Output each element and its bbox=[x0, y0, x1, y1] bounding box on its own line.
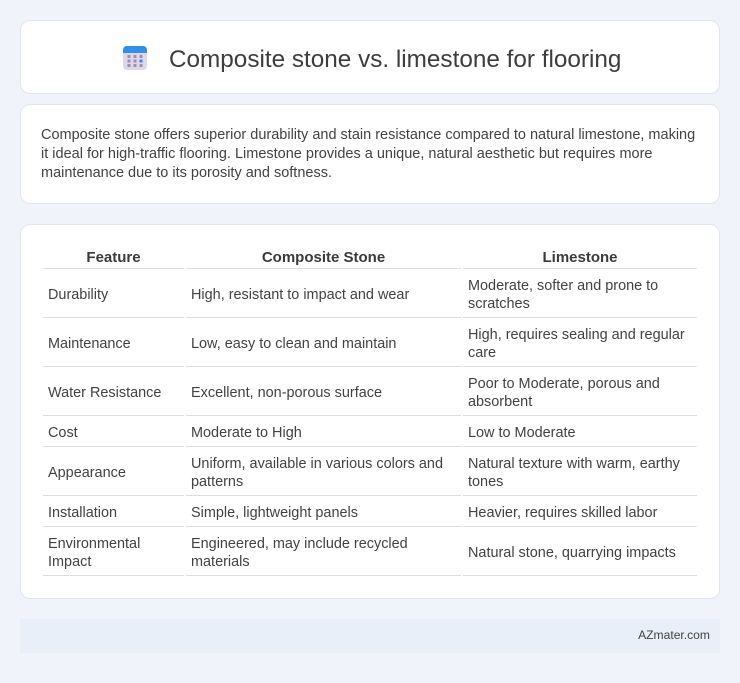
comparison table panel bbox=[20, 224, 720, 599]
row: Appearance: Appearance bbox=[48, 465, 126, 481]
icon: calendar bbox=[123, 46, 147, 70]
summary panel bbox=[20, 104, 720, 204]
summary text: Composite stone offers superior durability and stain resistance compared to natural limestone, making bbox=[41, 127, 695, 143]
comparison table: High, resistant to impact and wear bbox=[191, 287, 409, 303]
comparison table: Natural texture with warm, earthy bbox=[468, 456, 680, 472]
row: Environmental Impact: Environmental bbox=[48, 536, 140, 552]
comparison table: Moderate, softer and prone to bbox=[468, 278, 658, 294]
comparison table: care bbox=[468, 345, 496, 361]
row: Water Resistance: Water Resistance bbox=[48, 385, 161, 401]
comparison table: Natural stone, quarrying impacts bbox=[468, 545, 676, 561]
comparison table: scratches bbox=[468, 296, 530, 312]
row: Environmental Impact bbox=[48, 536, 140, 570]
comparison table: Simple, lightweight panels bbox=[191, 505, 358, 521]
comparison table: Poor to Moderate, porous and bbox=[468, 376, 660, 392]
comparison table: absorbent bbox=[468, 394, 532, 410]
comparison table: Low to Moderate bbox=[468, 425, 576, 441]
title card bbox=[20, 20, 720, 94]
comparison table: Heavier, requires skilled labor bbox=[468, 505, 657, 521]
footer bar bbox=[20, 619, 720, 653]
header: Composite Stone: Composite Stone bbox=[262, 249, 385, 266]
summary text bbox=[41, 127, 695, 181]
comparison table: High, requires sealing and regular bbox=[468, 327, 685, 343]
comparison table: Engineered, may include recycled bbox=[191, 536, 408, 552]
row: Durability: Durability bbox=[48, 287, 108, 303]
comparison table: Moderate to High bbox=[191, 425, 302, 441]
comparison table: tones bbox=[468, 474, 503, 490]
comparison table: materials bbox=[191, 554, 250, 570]
row: Cost: Cost bbox=[48, 425, 78, 441]
title: Composite stone vs. limestone for flooring bbox=[169, 46, 621, 73]
row: Maintenance: Maintenance bbox=[48, 336, 131, 352]
comparison table bbox=[43, 249, 697, 576]
row: Installation: Installation bbox=[48, 505, 117, 521]
header: Limestone: Limestone bbox=[542, 249, 618, 266]
row: Environmental Impact: Impact bbox=[48, 554, 91, 570]
summary text: it ideal for high-traffic flooring. Limestone provides a unique, natural aesthetic but requires more bbox=[41, 146, 652, 162]
comparison table: Excellent, non-porous surface bbox=[191, 385, 382, 401]
comparison table: Uniform, available in various colors and bbox=[191, 456, 443, 472]
summary text: maintenance due to its porosity and softness. bbox=[41, 165, 332, 181]
comparison table: Low, easy to clean and maintain bbox=[191, 336, 396, 352]
footer credit: AZmater.com bbox=[638, 628, 710, 642]
comparison table: patterns bbox=[191, 474, 243, 490]
header: Feature: Feature bbox=[86, 249, 141, 266]
